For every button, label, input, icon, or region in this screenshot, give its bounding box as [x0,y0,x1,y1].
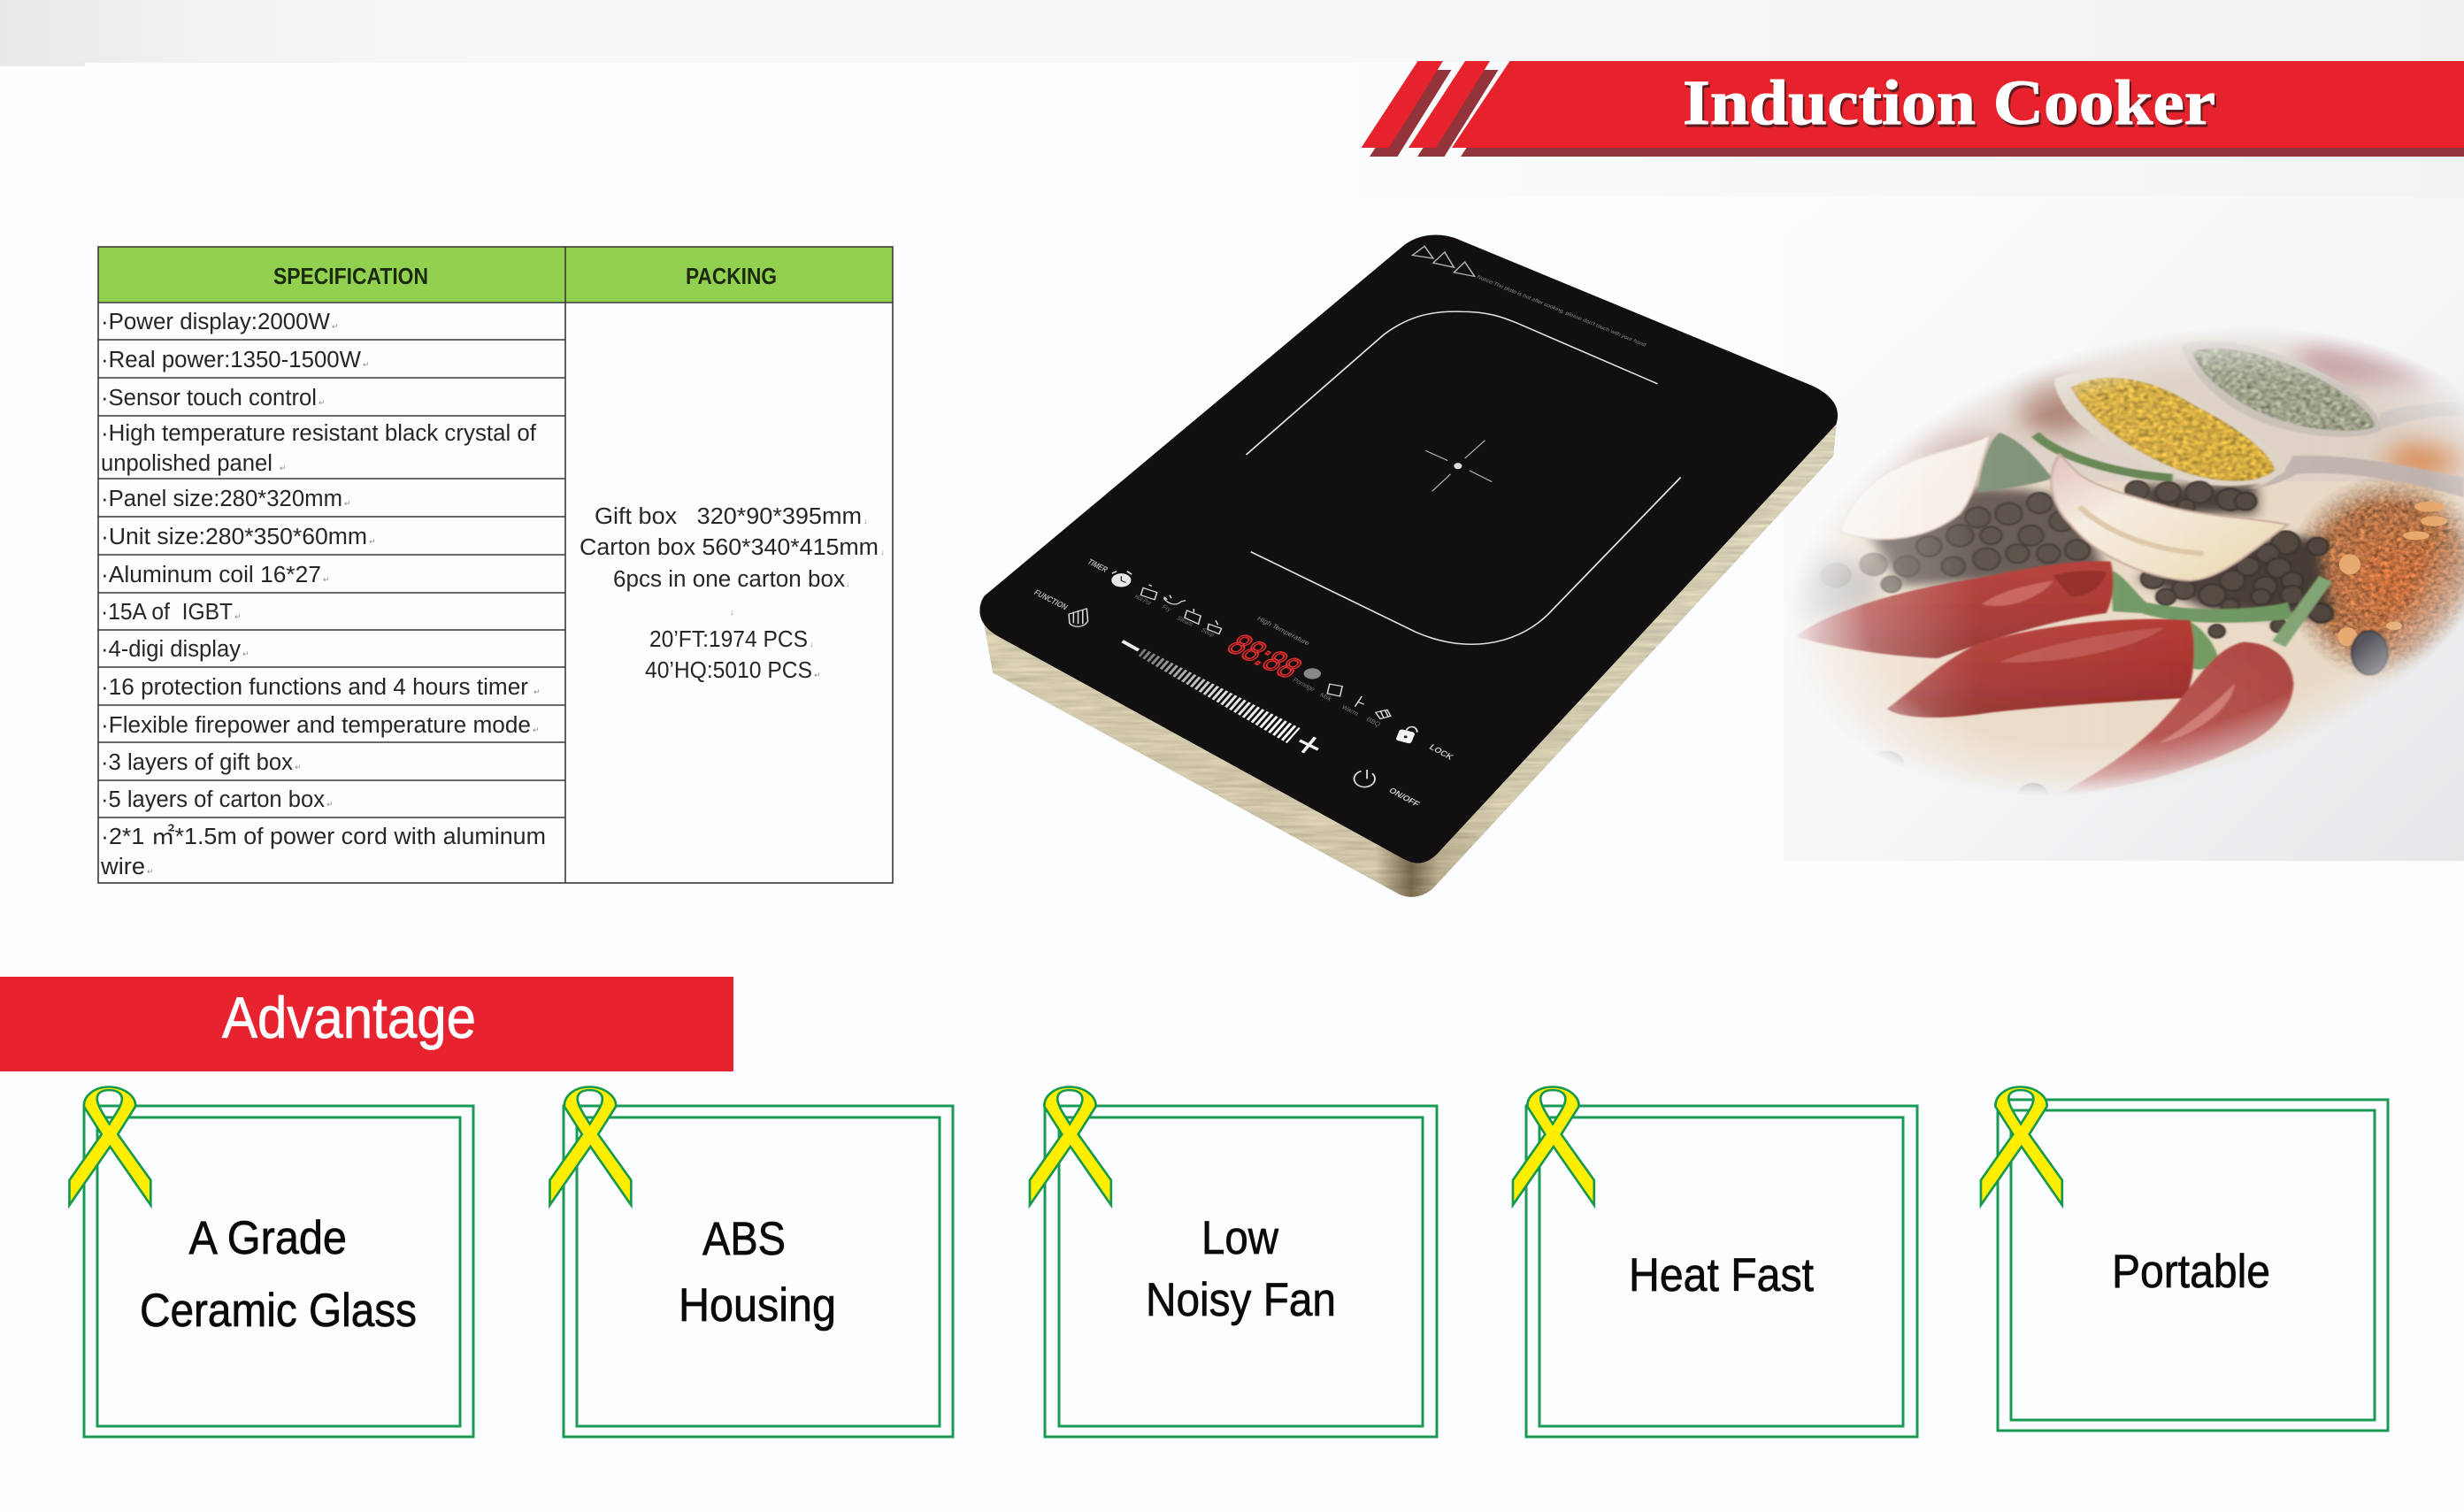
specification list: ·Sensor touch control [101,386,317,411]
card: ABS Housing: ABS [702,1213,786,1265]
specification list: ↵ [326,800,334,809]
control panel labels: ON/OFF [1386,787,1421,809]
control panel labels: BBQ [1365,716,1382,728]
left garlic and leaf [1840,434,1991,540]
icon: power button [1355,770,1375,787]
table header [98,247,893,303]
specification list: ↵ [319,398,326,407]
specification list: ↵ [332,322,339,331]
induction cooker product [980,235,1838,897]
warning icons and notice [1413,246,1647,348]
card: Low Noisy Fan: Noisy Fan [1146,1274,1336,1326]
control panel icons [1069,572,1417,787]
icon: function hand [1069,609,1088,626]
card: Heat Fast: Heat Fast [1629,1249,1814,1301]
plus button [1300,737,1318,753]
peppercorns [1822,481,2387,807]
icon: bbq [1376,710,1391,718]
specification list: ↵ [242,649,249,658]
specification list: ↵ [234,612,242,621]
table header: SPECIFICATION [273,263,428,289]
control panel labels: Hot Pot [1132,593,1154,607]
packing details: 40’HQ:5010 PCS [645,658,812,683]
packing details [580,504,885,683]
packing details: ↓ [864,517,867,526]
icon: lock [1395,726,1417,744]
packing details: Gift box 320*90*395mm [595,504,862,529]
card: Low Noisy Fan [1030,1087,1437,1437]
digital display: 88:88 [1219,628,1309,685]
spice photo [1796,332,2464,794]
icon: steam pot [1185,609,1201,624]
leaf and stem [1977,433,2053,492]
specification list: ·5 layers of carton box [101,787,325,812]
specification list: ·4-digi display [101,637,241,662]
garlic clove [2052,454,2288,580]
blurred background tones [1778,328,2464,618]
icon: milk [1327,684,1342,696]
power slider [1140,652,1293,736]
specification list: ↵ [363,360,370,369]
icon: ribbon [1030,1087,1111,1205]
advantage heading bar: Advantage [222,985,476,1050]
heating zone outline [1247,311,1681,644]
advantage heading bar [0,977,733,1071]
specification list: ·2*1 ㎡*1.5m of power cord with aluminum [101,825,546,849]
specification list: wire [100,855,145,879]
control panel labels: Steam [1176,615,1194,627]
specification list: ·High temperature resistant black crystal of [101,421,537,446]
control panel labels: Warm [1340,703,1361,718]
control panel labels: High Temperature [1255,615,1312,647]
packing details: ↓ [730,608,734,617]
spoon with turmeric [2248,456,2464,497]
icon: ribbon [549,1087,631,1205]
specification list: ·Unit size:280*350*60mm [101,525,367,549]
specification list: ·16 protection functions and 4 hours timer [101,675,529,700]
icon: ribbon [69,1087,150,1205]
specification list [100,310,546,879]
card: A Grade Ceramic Glass [69,1087,473,1437]
chili stems [2110,570,2293,623]
oregano spoon [2380,403,2449,428]
minus button [1123,641,1139,650]
card: Low Noisy Fan: Low [1201,1212,1279,1264]
specification list: unpolished panel [101,451,272,476]
specification list: ↵ [533,687,541,696]
control panel labels: Porridge [1291,676,1316,693]
specification list: ·Panel size:280*320mm [101,487,342,511]
icon: porridge [1304,668,1321,679]
packing details: ↓ [846,579,849,588]
control panel labels: Soup [1200,626,1217,638]
card: A Grade Ceramic Glass: Ceramic Glass [140,1285,417,1337]
control panel labels: FUNCTION [1032,588,1070,612]
specification list: ·Flexible firepower and temperature mode [101,713,531,738]
specification list: ↵ [147,867,154,876]
card: ABS Housing [549,1087,953,1437]
card: Portable [1981,1087,2388,1431]
specification list: ↵ [323,575,330,584]
card: A Grade Ceramic Glass: A Grade [189,1212,347,1264]
center cross mark [1425,441,1492,491]
icon: fry pan [1163,595,1186,604]
packing details: ↓ [810,640,814,649]
chili peppers [1796,561,2114,658]
packing details: Carton box 560*340*415mm [580,535,879,560]
specification list: ·Aluminum coil 16*27 [101,563,321,587]
specification list: ·Power display:2000W [101,310,330,334]
specification list: ↵ [533,725,540,734]
icon: ribbon [1981,1087,2062,1205]
specification list: ↵ [280,464,287,472]
control panel labels: LOCK [1427,743,1455,763]
specification list: ·3 layers of gift box [101,750,293,775]
cooker top glass [979,234,1838,863]
icon: hot pot [1140,585,1157,600]
specification list: ·15A of IGBT [101,600,233,625]
icon: timer clock [1111,572,1132,587]
packing details: 20’FT:1974 PCS [649,627,808,652]
card: ABS Housing: Housing [679,1279,836,1332]
packing details: ↵ [814,671,821,679]
packing details: ↓ [880,548,885,556]
card: Heat Fast [1513,1087,1917,1437]
icon: ribbon [1513,1087,1594,1205]
specification list: ·Real power:1350-1500W [101,348,361,372]
packing details: 6pcs in one carton box [613,567,845,592]
cooker side frame [983,416,1838,897]
specification list: ↵ [344,499,351,508]
ground spice [2299,478,2464,678]
title text: Induction Cooker [1683,67,2215,138]
specification list: ↵ [295,763,302,771]
specification list: ↵ [369,537,376,546]
warning icons and notice: Notice:The plate is hot after cooking, please don't touch with your hand [1476,274,1647,348]
icon: soup pot [1208,620,1222,634]
icon: warm [1355,696,1364,707]
control panel labels: Fry [1161,603,1173,613]
card: Portable: Portable [2112,1246,2270,1298]
control panel labels: Milk [1318,691,1334,702]
table header: PACKING [686,263,777,289]
specification and packing table [98,247,893,883]
control panel labels [1032,558,1455,809]
control panel labels: TIMER [1085,558,1109,574]
title banner: Induction Cooker [1361,61,2464,157]
